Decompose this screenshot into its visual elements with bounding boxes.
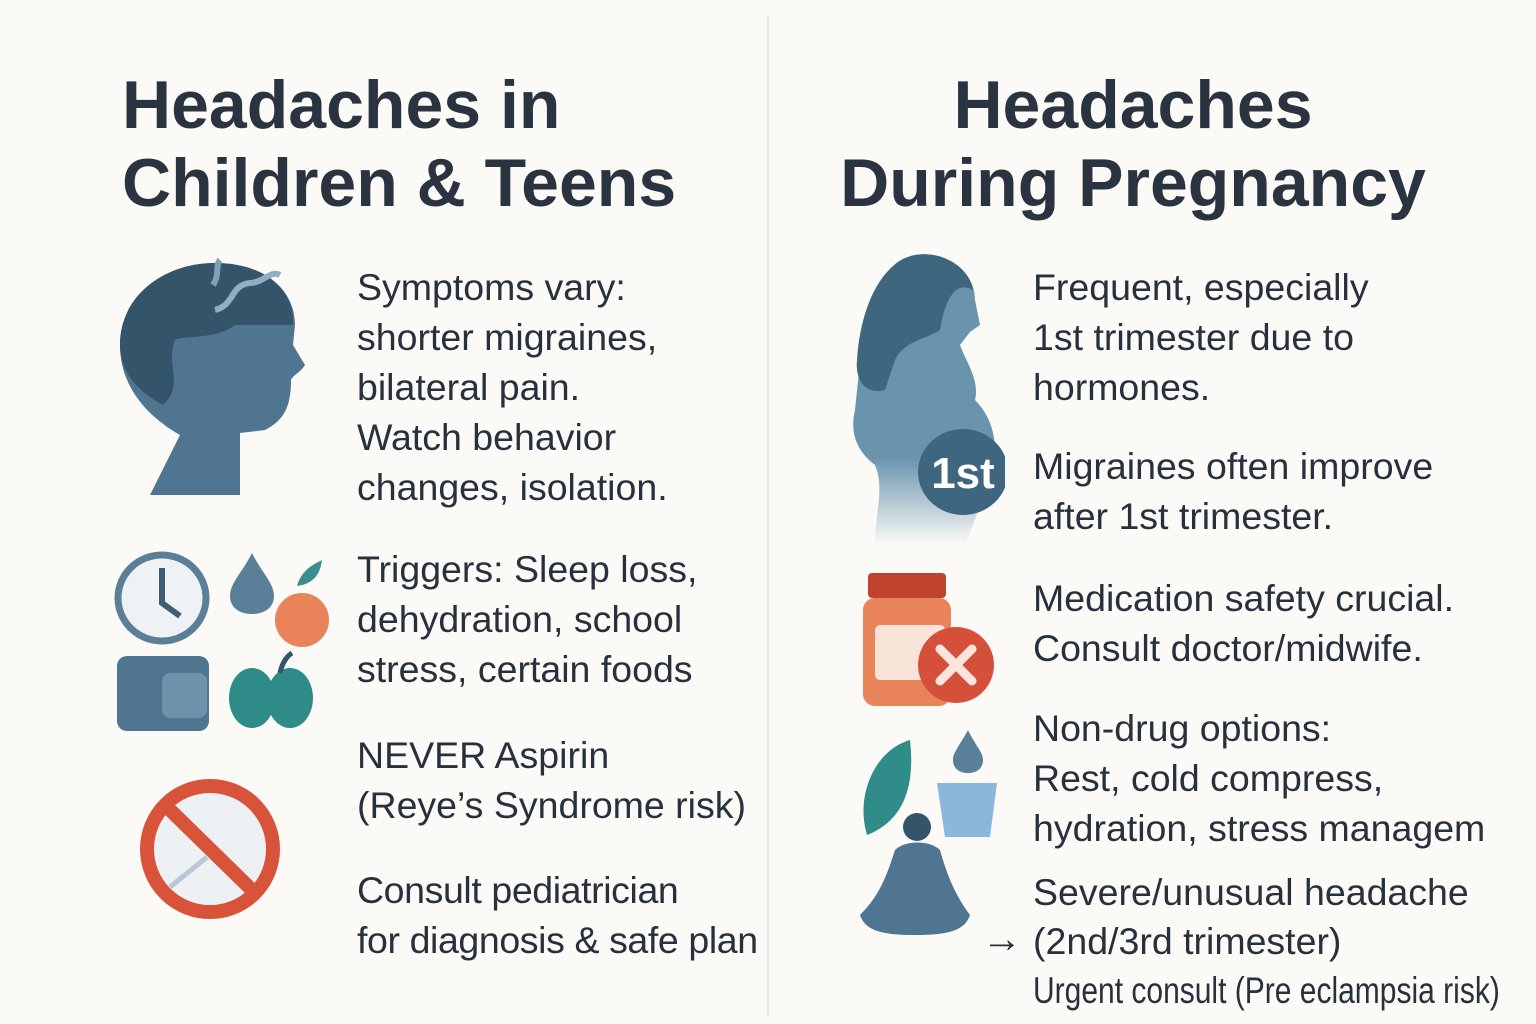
text: symptoms: changes, isolation.	[357, 466, 668, 508]
divider	[767, 15, 769, 1015]
text: non-drug: Non-drug options:	[1033, 707, 1331, 749]
title: children: Headaches in	[122, 67, 560, 143]
title: pregnancy: During Pregnancy	[840, 145, 1426, 221]
text: frequent: hormones.	[1033, 366, 1210, 408]
text: non-drug: Rest, cold compress,	[1033, 757, 1383, 799]
text: migraines improve: after 1st trimester.	[1033, 495, 1333, 537]
icon: medication jar	[863, 573, 994, 706]
text: symptoms: Watch behavior	[357, 416, 616, 458]
text: severe headache: (2nd/3rd trimester)	[1033, 920, 1341, 962]
icon: non-drug options	[860, 730, 997, 935]
text: triggers: Triggers: Sleep loss,	[357, 548, 697, 590]
text: triggers: stress, certain foods	[357, 648, 693, 690]
text: frequent	[1033, 266, 1369, 408]
text: frequent: 1st trimester due to	[1033, 316, 1354, 358]
arrow: →	[982, 917, 1022, 961]
icon: triggers	[114, 552, 329, 731]
text: consult pediatrician: Consult pediatrician	[357, 869, 678, 911]
icon: child head	[120, 258, 305, 495]
text: consult pediatrician: for diagnosis & safe plan	[357, 919, 758, 961]
text: medication: Medication safety crucial.	[1033, 577, 1454, 619]
text: severe headache	[1033, 871, 1500, 1011]
icon: pregnant woman: 1st	[931, 449, 995, 498]
text: symptoms: shorter migraines,	[357, 316, 657, 358]
title: children: Children & Teens	[122, 145, 676, 221]
text: aspirin: NEVER Aspirin	[357, 734, 609, 776]
text: severe headache: Urgent consult (Pre eclampsia risk)	[1033, 969, 1500, 1011]
text: consult pediatrician	[357, 869, 758, 961]
text: frequent: Frequent, especially	[1033, 266, 1369, 308]
text: severe headache: Severe/unusual headache	[1033, 871, 1469, 913]
text: triggers	[357, 548, 697, 690]
text: medication: Consult doctor/midwife.	[1033, 627, 1423, 669]
text: migraines improve	[1033, 445, 1433, 537]
text: medication	[1033, 577, 1454, 669]
title: children	[122, 67, 676, 221]
text: symptoms	[357, 266, 668, 508]
text: non-drug	[1033, 707, 1485, 849]
text: aspirin: (Reye’s Syndrome risk)	[357, 784, 746, 826]
text: symptoms: Symptoms vary:	[357, 266, 626, 308]
text: migraines improve: Migraines often improve	[1033, 445, 1433, 487]
title: pregnancy	[840, 67, 1426, 221]
icon: no aspirin	[140, 779, 280, 919]
icon: pregnant woman	[853, 254, 1005, 540]
text: aspirin	[357, 734, 746, 826]
text: symptoms: bilateral pain.	[357, 366, 580, 408]
title: pregnancy: Headaches	[953, 67, 1313, 143]
text: triggers: dehydration, school	[357, 598, 682, 640]
text: non-drug: hydration, stress managem	[1033, 807, 1485, 849]
